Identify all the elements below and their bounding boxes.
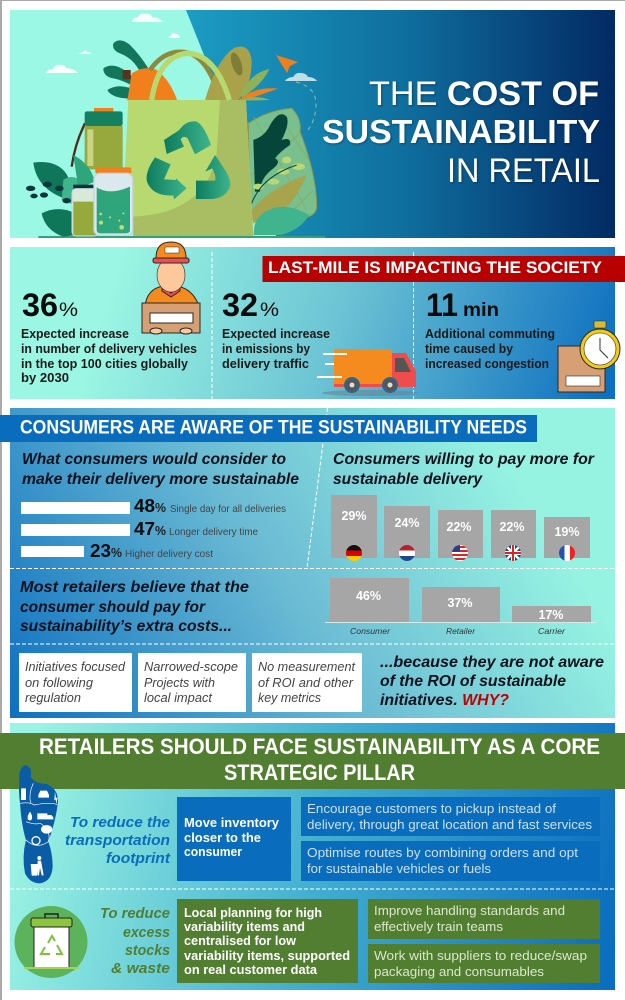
callout: no measurement: key metrics (258, 690, 321, 705)
callout: no measurement (252, 653, 362, 712)
icon: orange (127, 68, 177, 101)
callout: no measurement: of ROI and other (258, 675, 354, 690)
box: local planning: Local planning for high (184, 906, 322, 920)
icon: leafy greens behind bag (103, 40, 148, 101)
bar chart: willingness by country: 22% (446, 520, 472, 534)
text: 32% description (222, 327, 330, 371)
icon: baguette (205, 47, 252, 100)
stat: 36% (22, 287, 78, 323)
bar chart: who should pay: Carrier (538, 626, 566, 636)
text: to reduce excess stocks and waste: & waste (111, 960, 170, 977)
text: because they are not aware: of the ROI of sustainable (380, 673, 566, 690)
text: to reduce the transportation footprint: footprint (106, 850, 171, 867)
icon: bag handle front (152, 53, 229, 100)
icon: drink bottle (72, 123, 85, 167)
text: to reduce the transportation footprint: transportation (65, 832, 170, 849)
bar chart: delivery options (21, 496, 286, 561)
icon: recycling symbol (147, 121, 230, 199)
text: 36% description: in the top 100 cities globally (21, 357, 188, 371)
icon: paper plane (276, 55, 298, 73)
panel: core strategic pillar (0, 723, 625, 990)
box: optimise routes: Optimise routes by combining orders and opt (307, 845, 578, 860)
text: 36% description: Expected increase (21, 327, 129, 341)
bar chart: delivery options: Longer delivery time (169, 526, 258, 538)
text: most retailers believe: consumer should pay for (20, 599, 206, 616)
icon: dark sprig (26, 182, 71, 203)
text: to reduce excess stocks and waste: excess (123, 924, 170, 941)
text: 11 min description (425, 327, 555, 371)
text: to reduce excess stocks and waste: To reduce (100, 905, 170, 922)
bar chart: willingness by country: 29% (341, 509, 367, 523)
icon: flag UK (505, 545, 521, 561)
box: local planning: on real customer data (184, 963, 318, 977)
stat: 11 min (426, 287, 499, 323)
icon: large jar (95, 167, 131, 173)
text: because they are not aware: initiatives. WHY? (380, 692, 510, 709)
text: to reduce the transportation footprint (65, 814, 171, 867)
text: because they are not aware (380, 654, 604, 709)
icon: recycling bin (14, 906, 88, 978)
title (322, 75, 600, 190)
heading banner: RETAILERS SHOULD FACE SUSTAINABILITY AS A CORE (39, 734, 600, 759)
bar chart: who should pay: 46% (356, 589, 381, 603)
bar chart: delivery options: % (155, 523, 166, 538)
icon: flag USA (452, 545, 468, 561)
heading: consumers willing to pay: Consumers willing to pay more for (333, 451, 595, 468)
heading: what consumers would consider (22, 451, 299, 488)
stat: 32% (222, 287, 279, 323)
bar chart: delivery options: Higher delivery cost (125, 548, 213, 560)
box: move inventory: Move inventory (184, 816, 279, 830)
box: move inventory: consumer (184, 845, 242, 859)
icon: sprigs (240, 69, 269, 97)
box: encourage pickup (301, 797, 600, 836)
text: because they are not aware: ...because they are not aware (380, 654, 604, 671)
stat: 11 min: 11 (426, 287, 458, 323)
icon: flag France (559, 545, 575, 561)
box: improve handling (368, 899, 600, 939)
title: SUSTAINABILITY (322, 113, 600, 150)
callout: regulation: on following (25, 675, 94, 690)
stat: 32%: 32 (222, 287, 258, 323)
text: 11 min description: time caused by (425, 342, 513, 356)
callout: regulation: Initiatives focused (25, 659, 126, 674)
text: most retailers believe: Most retailers believe that the (20, 579, 249, 596)
heading: what consumers would consider: What consumers would consider to (22, 451, 286, 468)
icon: clouds (46, 13, 317, 81)
box: local planning (177, 899, 358, 983)
panel: hero header (10, 10, 615, 238)
box: optimise routes: for sustainable vehicles or fuels (307, 861, 492, 876)
box: move inventory: closer to the (184, 831, 261, 845)
callout: narrowed scope: local impact (144, 690, 213, 705)
icon: delivery truck (317, 349, 418, 396)
bar chart: willingness by country: 24% (394, 516, 420, 530)
callout: regulation (19, 653, 132, 712)
stat: 11 min: min (463, 300, 499, 321)
box: optimise routes (301, 841, 600, 881)
text: 32% description: delivery traffic (222, 357, 309, 371)
text: to reduce the transportation footprint: To reduce the (70, 814, 170, 831)
bar chart: delivery options: 23 (90, 541, 111, 561)
text: most retailers believe: sustainability’s extra costs... (20, 618, 232, 635)
stat: 36%: % (59, 300, 78, 321)
callout: narrowed scope: Projects with (144, 675, 215, 690)
box: local planning: variability items, supported (184, 949, 350, 963)
bar chart: who should pay (325, 578, 597, 636)
text: most retailers believe (20, 579, 249, 635)
bar chart: delivery options: % (155, 500, 166, 515)
icon: small jar (73, 185, 95, 189)
illustration: shopping bag with produce, jars and net bag (26, 40, 325, 238)
bar chart: delivery options: 48 (134, 496, 155, 516)
box: local planning: centralised for low (184, 934, 296, 948)
icon: bag handle back (150, 52, 220, 100)
icon: flag Germany (346, 545, 362, 561)
box: move inventory (177, 797, 291, 881)
icon: bag body (125, 100, 253, 236)
text: 32% description: Expected increase (222, 327, 330, 341)
bar chart: willingness by country (331, 495, 590, 561)
box: local planning: variability items and (184, 920, 305, 934)
callout: regulation: regulation (25, 690, 81, 705)
icon: leaves (33, 162, 70, 199)
title: THE COST OF (369, 75, 599, 113)
heading banner: CONSUMERS ARE AWARE OF THE SUSTAINABILITY NEEDS (20, 418, 527, 438)
bar chart: who should pay: 17% (538, 608, 564, 622)
icon: flag Netherlands (399, 545, 415, 561)
box: improve handling: Improve handling standards and (374, 903, 565, 918)
box: improve handling: effectively train teams (374, 919, 504, 934)
text: 36% description: by 2030 (21, 371, 69, 385)
icon: delivery worker with box (142, 242, 200, 334)
callout: narrowed scope (138, 653, 246, 712)
heading banner (0, 733, 625, 789)
text: 36% description: in number of delivery vehicles (21, 342, 197, 356)
icon: dashed flight path (296, 82, 316, 130)
stat: 36%: 36 (22, 287, 58, 323)
heading: what consumers would consider: make their delivery more sustainable (22, 471, 299, 488)
heading banner: STRATEGIC PILLAR (224, 760, 415, 785)
heading banner: LAST-MILE IS IMPACTING THE SOCIETY (268, 258, 603, 277)
text: to reduce excess stocks and waste (100, 905, 170, 977)
text: 11 min description: Additional commuting (425, 327, 555, 341)
text: to reduce excess stocks and waste: stocks (125, 942, 170, 959)
text: 36% description (21, 327, 197, 385)
box: encourage pickup: delivery, through great location and fast services (307, 817, 593, 832)
box: work with suppliers: Work with suppliers to reduce/swap (374, 948, 587, 963)
icon: net bag (248, 108, 317, 219)
bar chart: willingness by country: 22% (499, 520, 525, 534)
bar chart: delivery options: 47 (134, 519, 155, 539)
panel: consumers aware (0, 408, 615, 718)
heading: consumers willing to pay: sustainable delivery (333, 471, 483, 488)
icon: parcel and stopwatch (558, 321, 620, 392)
heading: consumers willing to pay (333, 451, 595, 488)
bar chart: who should pay: Retailer (446, 626, 476, 636)
text: 32% description: in emissions by (222, 342, 310, 356)
bar chart: delivery options: Single day for all deliveries (170, 503, 286, 515)
bar chart: who should pay: 37% (447, 596, 473, 610)
bar chart: delivery options: % (111, 545, 122, 560)
icon: footprint with transport symbols (19, 765, 58, 883)
bar chart: who should pay: Consumer (350, 626, 391, 636)
box: encourage pickup: Encourage customers to pickup instead of (307, 801, 556, 816)
text: 11 min description: increased congestion (425, 357, 549, 371)
box: work with suppliers (368, 944, 600, 983)
callout: narrowed scope: Narrowed-scope (144, 659, 238, 674)
callout: no measurement: No measurement (258, 659, 356, 674)
stat: 32%: % (260, 300, 279, 321)
panel: last-mile impact (10, 242, 625, 399)
title: IN RETAIL (447, 152, 600, 190)
bar chart: willingness by country: 19% (554, 525, 580, 539)
box: work with suppliers: packaging and consumables (374, 964, 545, 979)
heading banner (262, 256, 625, 282)
